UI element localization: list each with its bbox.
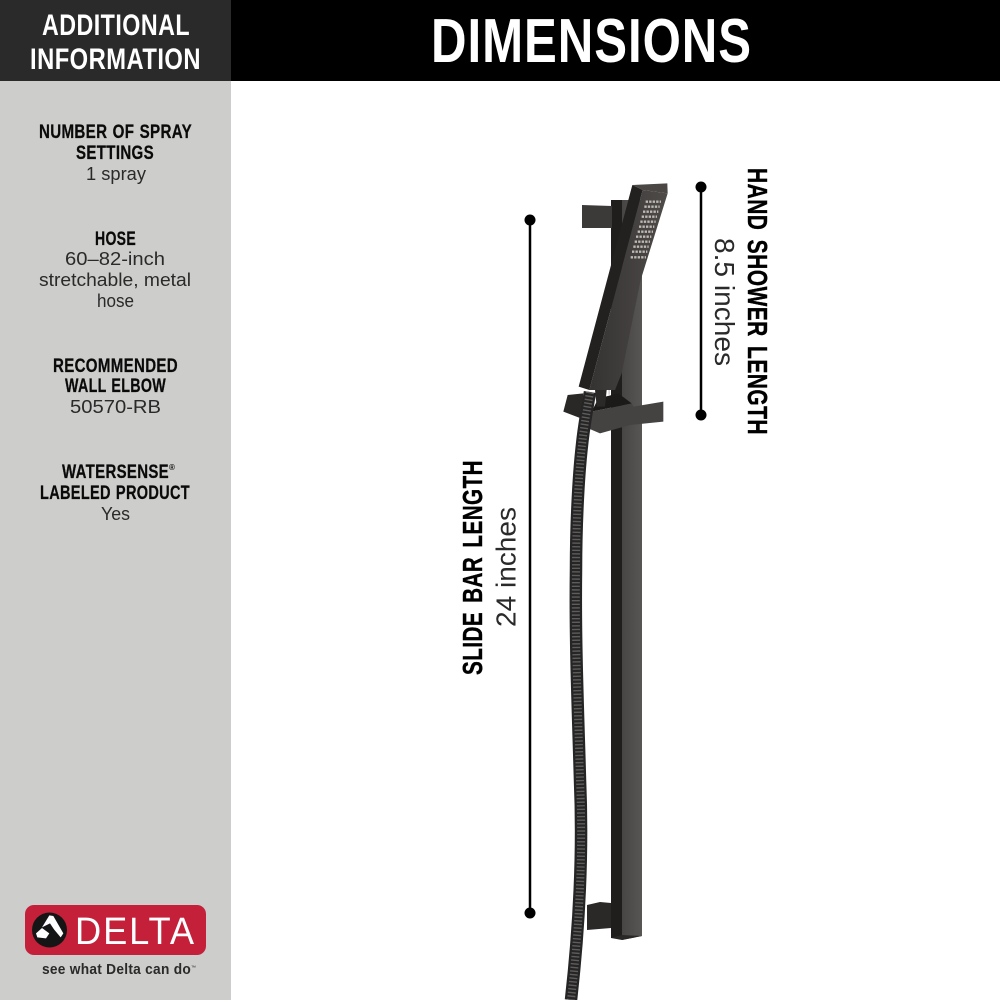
label: slide bar length: SLIDE BAR LENGTH (457, 460, 488, 675)
spray nozzles (631, 202, 661, 257)
header: additional information (0, 0, 231, 81)
sidebar panel (0, 0, 231, 1000)
bottom wall bracket (587, 902, 611, 930)
label: hand shower length (709, 168, 773, 435)
label: hand shower length: HAND SHOWER LENGTH (742, 168, 773, 435)
spec: watersense labeled product: LABELED PRODUCT (40, 483, 190, 504)
spec: number of spray settings: NUMBER OF SPRAY (39, 122, 192, 143)
spec: hose: hose (97, 290, 134, 311)
spec: recommended wall elbow (53, 356, 178, 417)
delta logo: ™ (191, 965, 196, 971)
main white panel (231, 81, 1000, 1000)
header: dimensions (231, 0, 1000, 81)
delta logo: see what Delta can do (42, 961, 191, 978)
spec: hose: HOSE (95, 229, 136, 250)
spec: number of spray settings (39, 122, 192, 184)
delta logo (25, 905, 206, 978)
spec: hose: 60–82-inch (65, 248, 165, 269)
label: hand shower length: 8.5 inches (709, 238, 740, 366)
spec: recommended wall elbow: WALL ELBOW (65, 376, 166, 397)
spec: hose (39, 229, 191, 311)
hand shower head (579, 183, 668, 390)
spec: number of spray settings: SETTINGS (76, 143, 154, 164)
spec: watersense labeled product: ® (169, 463, 175, 472)
spec: recommended wall elbow: RECOMMENDED (53, 356, 178, 377)
spec: watersense labeled product: WATERSENSE (62, 462, 169, 483)
label: slide bar length: 24 inches (490, 507, 522, 627)
header: additional information: INFORMATION (30, 43, 201, 76)
spec: watersense labeled product: Yes (101, 503, 130, 524)
spec: watersense labeled product (40, 462, 190, 524)
dimension line: slide bar (524, 214, 536, 918)
dimension line: hand shower (696, 182, 706, 420)
slide bar (611, 200, 642, 940)
header: additional information: ADDITIONAL (42, 9, 190, 42)
spec: recommended wall elbow: 50570-RB (70, 396, 161, 417)
spec: hose: stretchable, metal (39, 269, 191, 290)
delta logo: DELTA (75, 911, 196, 953)
hose (571, 392, 590, 1000)
top wall bracket (582, 205, 612, 228)
header: dimensions: DIMENSIONS (431, 7, 752, 76)
spec: number of spray settings: 1 spray (86, 163, 147, 184)
slider clamp (563, 389, 663, 433)
label: slide bar length (457, 460, 522, 675)
